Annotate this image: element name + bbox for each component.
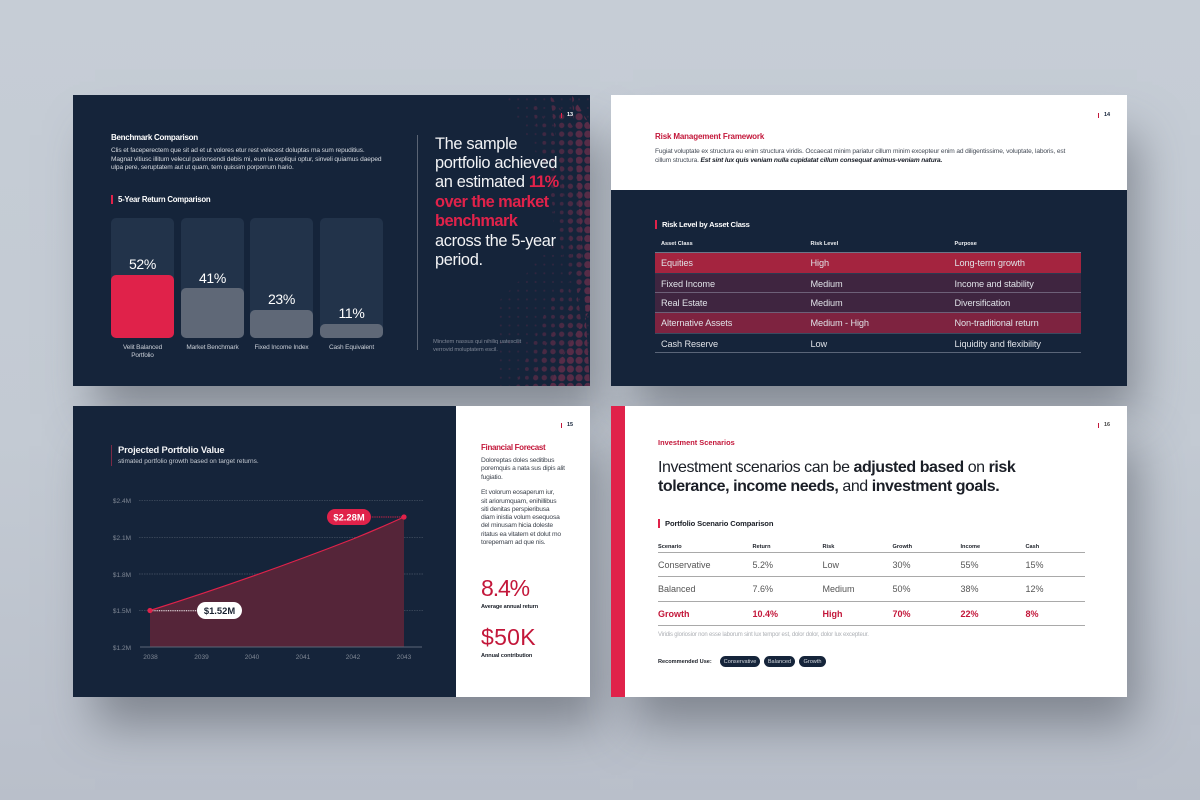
scenario table: High [822, 608, 842, 618]
chart title block [111, 445, 261, 466]
area line chart: 2040 [245, 654, 260, 661]
area line chart: $2.28M [333, 512, 365, 522]
area line chart [113, 498, 423, 661]
scenario table: 8% [1026, 608, 1039, 618]
footnote: verrovid moluptatem escil. [433, 347, 498, 353]
body text: Clis et faceperectem que sit ad et ut volores etur rest velecest doluptas ma sum repuditius. [111, 147, 365, 154]
heading: Benchmark Comparison [111, 133, 198, 142]
area line chart: 2038 [143, 654, 158, 661]
page number: 14 [1104, 112, 1110, 118]
headline: Investment scenarios can be adjusted based on risk [658, 458, 1015, 476]
intro text: cillum structura. Est sint lux quis veniam nulla cupidatat cillum consequat animus-veniam natura. [655, 157, 942, 164]
key takeaway statement: benchmark [435, 212, 517, 230]
key takeaway statement [435, 134, 559, 269]
bar chart [111, 218, 383, 359]
eyebrow heading: Investment Scenarios [658, 438, 735, 447]
area line chart: $1.52M [204, 605, 235, 616]
bar chart: 11% [338, 305, 365, 321]
recommended use label: Recommended Use: [658, 658, 712, 664]
sidebar text [481, 457, 565, 546]
headline [658, 458, 1016, 495]
sidebar text: del minusam hicia doleste [481, 522, 553, 529]
chart heading: 5-Year Return Comparison [118, 195, 210, 204]
sidebar text: torepernam ad que nis. [481, 539, 545, 546]
scenario table: 38% [960, 584, 979, 594]
scenario table: Balanced [658, 584, 696, 594]
scenario table: Growth [892, 544, 912, 550]
area line chart: $1.2M [113, 645, 131, 652]
footnote [433, 339, 522, 353]
scenario table: Medium [822, 584, 855, 594]
key takeaway statement: across the 5-year [435, 232, 556, 250]
scenario table: 7.6% [752, 584, 773, 594]
panel: investment scenarios slide [611, 406, 1127, 697]
sidebar text: siti denitas perspieribusa [481, 506, 549, 513]
scenario table: Return [752, 544, 771, 550]
page number: 13 [567, 112, 573, 118]
page number [561, 423, 581, 428]
risk table: Medium [810, 279, 843, 289]
scenario table: Growth [658, 608, 690, 618]
risk table: Real Estate [661, 298, 707, 308]
sidebar text: Doloreptas doles seditibus [481, 457, 554, 464]
sidebar text: ritatus ea vitatem et dolut mo [481, 531, 561, 538]
area line chart: $2.1M [113, 535, 131, 542]
risk table: Asset Class [661, 241, 693, 247]
sidebar text: poremquis a nata sus dipis alit [481, 465, 565, 472]
body text [111, 147, 382, 171]
stat: annual contribution: Annual contribution [481, 653, 532, 659]
tag: conservative: Conservative [724, 658, 756, 664]
scenario table: Cash [1026, 544, 1039, 550]
body text: ulpa pere, seruptatem aut ut quam, tem quissim porporrum hario. [111, 164, 294, 171]
bar chart: 23% [268, 291, 295, 307]
table note: Viridis gloriosior non esse laborum sint lux tempor est, dolor dolor, dolor lux excepteur. [658, 632, 869, 638]
risk table: Income and stability [954, 279, 1034, 289]
risk table: Long-term growth [954, 258, 1025, 268]
divider [417, 135, 418, 350]
bar chart: 52% [129, 256, 156, 272]
stat: average annual return: Average annual return [481, 604, 538, 610]
panel: benchmark comparison slide [73, 95, 590, 386]
scenario table: Conservative [658, 560, 711, 570]
risk table: Diversification [954, 298, 1010, 308]
white sidebar [456, 406, 590, 697]
tag: balanced [764, 656, 795, 667]
panel: risk management slide [611, 95, 1127, 386]
red side strip [611, 406, 625, 697]
stat: average annual return [481, 575, 538, 610]
sidebar heading: Financial Forecast [481, 443, 545, 452]
scenario table: 12% [1026, 584, 1044, 594]
footnote: Minctem nassus qui nihiliq uatescilit [433, 339, 521, 345]
area line chart: $1.5M [113, 608, 131, 615]
scenario table: 30% [892, 560, 911, 570]
panel: projected portfolio value slide [73, 406, 590, 697]
scenario table: 55% [960, 560, 979, 570]
stat: annual contribution: $50K [481, 624, 536, 650]
sidebar text: Et volorum eosaperum iur, [481, 489, 554, 496]
area line chart: 2039 [194, 654, 209, 661]
sidebar text: diam inistia volum esequosa [481, 514, 560, 521]
area line chart: 2042 [346, 654, 361, 661]
body text: Magnat vitiusc illitum velecul parionsendi debis mi, eum la expliqui optur, sinveli quiamus daeped [111, 156, 381, 162]
scenario table: 50% [892, 584, 911, 594]
scenario table: Scenario [658, 544, 682, 550]
key takeaway statement: over the market [435, 193, 549, 211]
chart title block: stimated portfolio growth based on target returns. [118, 458, 259, 464]
page number: 16 [1104, 422, 1110, 428]
stat: average annual return: 8.4% [481, 575, 529, 601]
bar chart: Cash Equivalent [329, 344, 374, 351]
scenario table: 70% [892, 608, 911, 618]
area line chart: 2041 [296, 654, 311, 661]
risk table: Purpose [954, 241, 977, 247]
page number [1098, 423, 1118, 428]
risk table: Alternative Assets [661, 318, 732, 328]
page number: 15 [567, 422, 573, 428]
risk table: Risk Level [810, 241, 838, 247]
sidebar text: fugiatio. [481, 474, 503, 480]
dark table panel [611, 190, 1127, 386]
risk table: High [810, 258, 829, 268]
scenario table: 5.2% [752, 560, 773, 570]
bar chart: Portfolio [131, 352, 154, 359]
chart title block: Projected Portfolio Value [118, 444, 224, 455]
bar chart: 41% [199, 270, 226, 286]
risk table: Cash Reserve [661, 339, 718, 349]
tag: growth [799, 656, 826, 667]
key takeaway statement: The sample [435, 134, 517, 152]
page number [561, 113, 581, 118]
risk table: Non-traditional return [954, 318, 1039, 328]
key takeaway statement: period. [435, 251, 483, 269]
key takeaway statement: portfolio achieved [435, 154, 557, 172]
headline: tolerance, income needs, and investment goals. [658, 478, 999, 495]
intro text: Fugiat voluptate ex structura eu enim structura viridis. Occaecat minim pariatur cillum minim excepteur enim ad diligentissime, voluptate, laboris, est [655, 148, 1065, 155]
risk table [655, 241, 1081, 353]
halftone dot pattern [500, 96, 590, 386]
sidebar text: sit ariorumquam, enihillibus [481, 498, 556, 505]
tag: growth: Growth [803, 658, 822, 664]
key takeaway statement: an estimated 11% [435, 173, 558, 191]
scenario table: Low [822, 560, 839, 570]
scenario table: Income [960, 544, 980, 550]
area line chart: $2.4M [113, 498, 131, 505]
risk table: Equities [661, 258, 693, 268]
table heading: Portfolio Scenario Comparison [665, 519, 773, 528]
risk table: Medium [810, 298, 843, 308]
risk table: Liquidity and flexibility [954, 339, 1041, 349]
area line chart: 2043 [397, 654, 412, 661]
scenario table: 10.4% [752, 608, 778, 618]
area line chart: $1.8M [113, 572, 131, 579]
page number [1098, 113, 1118, 118]
scenario table: 22% [960, 608, 979, 618]
tag: balanced: Balanced [768, 658, 791, 664]
risk table: Medium - High [810, 318, 869, 328]
bar chart: Market Benchmark [186, 344, 239, 351]
heading: Risk Management Framework [655, 132, 764, 141]
tag: conservative [720, 656, 760, 667]
risk table: Low [810, 339, 827, 349]
scenario table: 15% [1026, 560, 1044, 570]
table heading: Risk Level by Asset Class [662, 220, 750, 229]
scenario table [658, 544, 1085, 626]
risk table: Fixed Income [661, 279, 715, 289]
bar chart: Velit Balanced [123, 344, 162, 351]
bar chart: Fixed Income Index [254, 344, 309, 351]
scenario table: Risk [822, 544, 834, 550]
intro text [655, 148, 1066, 164]
